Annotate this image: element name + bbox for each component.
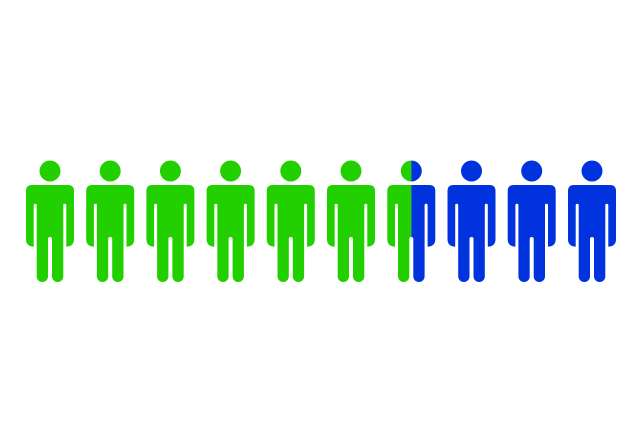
- person 9: blue: [508, 160, 556, 282]
- person 6: green: [327, 160, 375, 282]
- person 2: green: [86, 160, 134, 282]
- person 8: blue: [448, 160, 496, 282]
- person 3: green: [146, 160, 194, 282]
- person 10: blue: [568, 160, 616, 282]
- person 7: half green, half blue: [387, 160, 435, 282]
- person 5: green: [267, 160, 315, 282]
- pictogram: row of ten people: [26, 160, 616, 282]
- person 1: green: [26, 160, 74, 282]
- person 4: green: [207, 160, 255, 282]
